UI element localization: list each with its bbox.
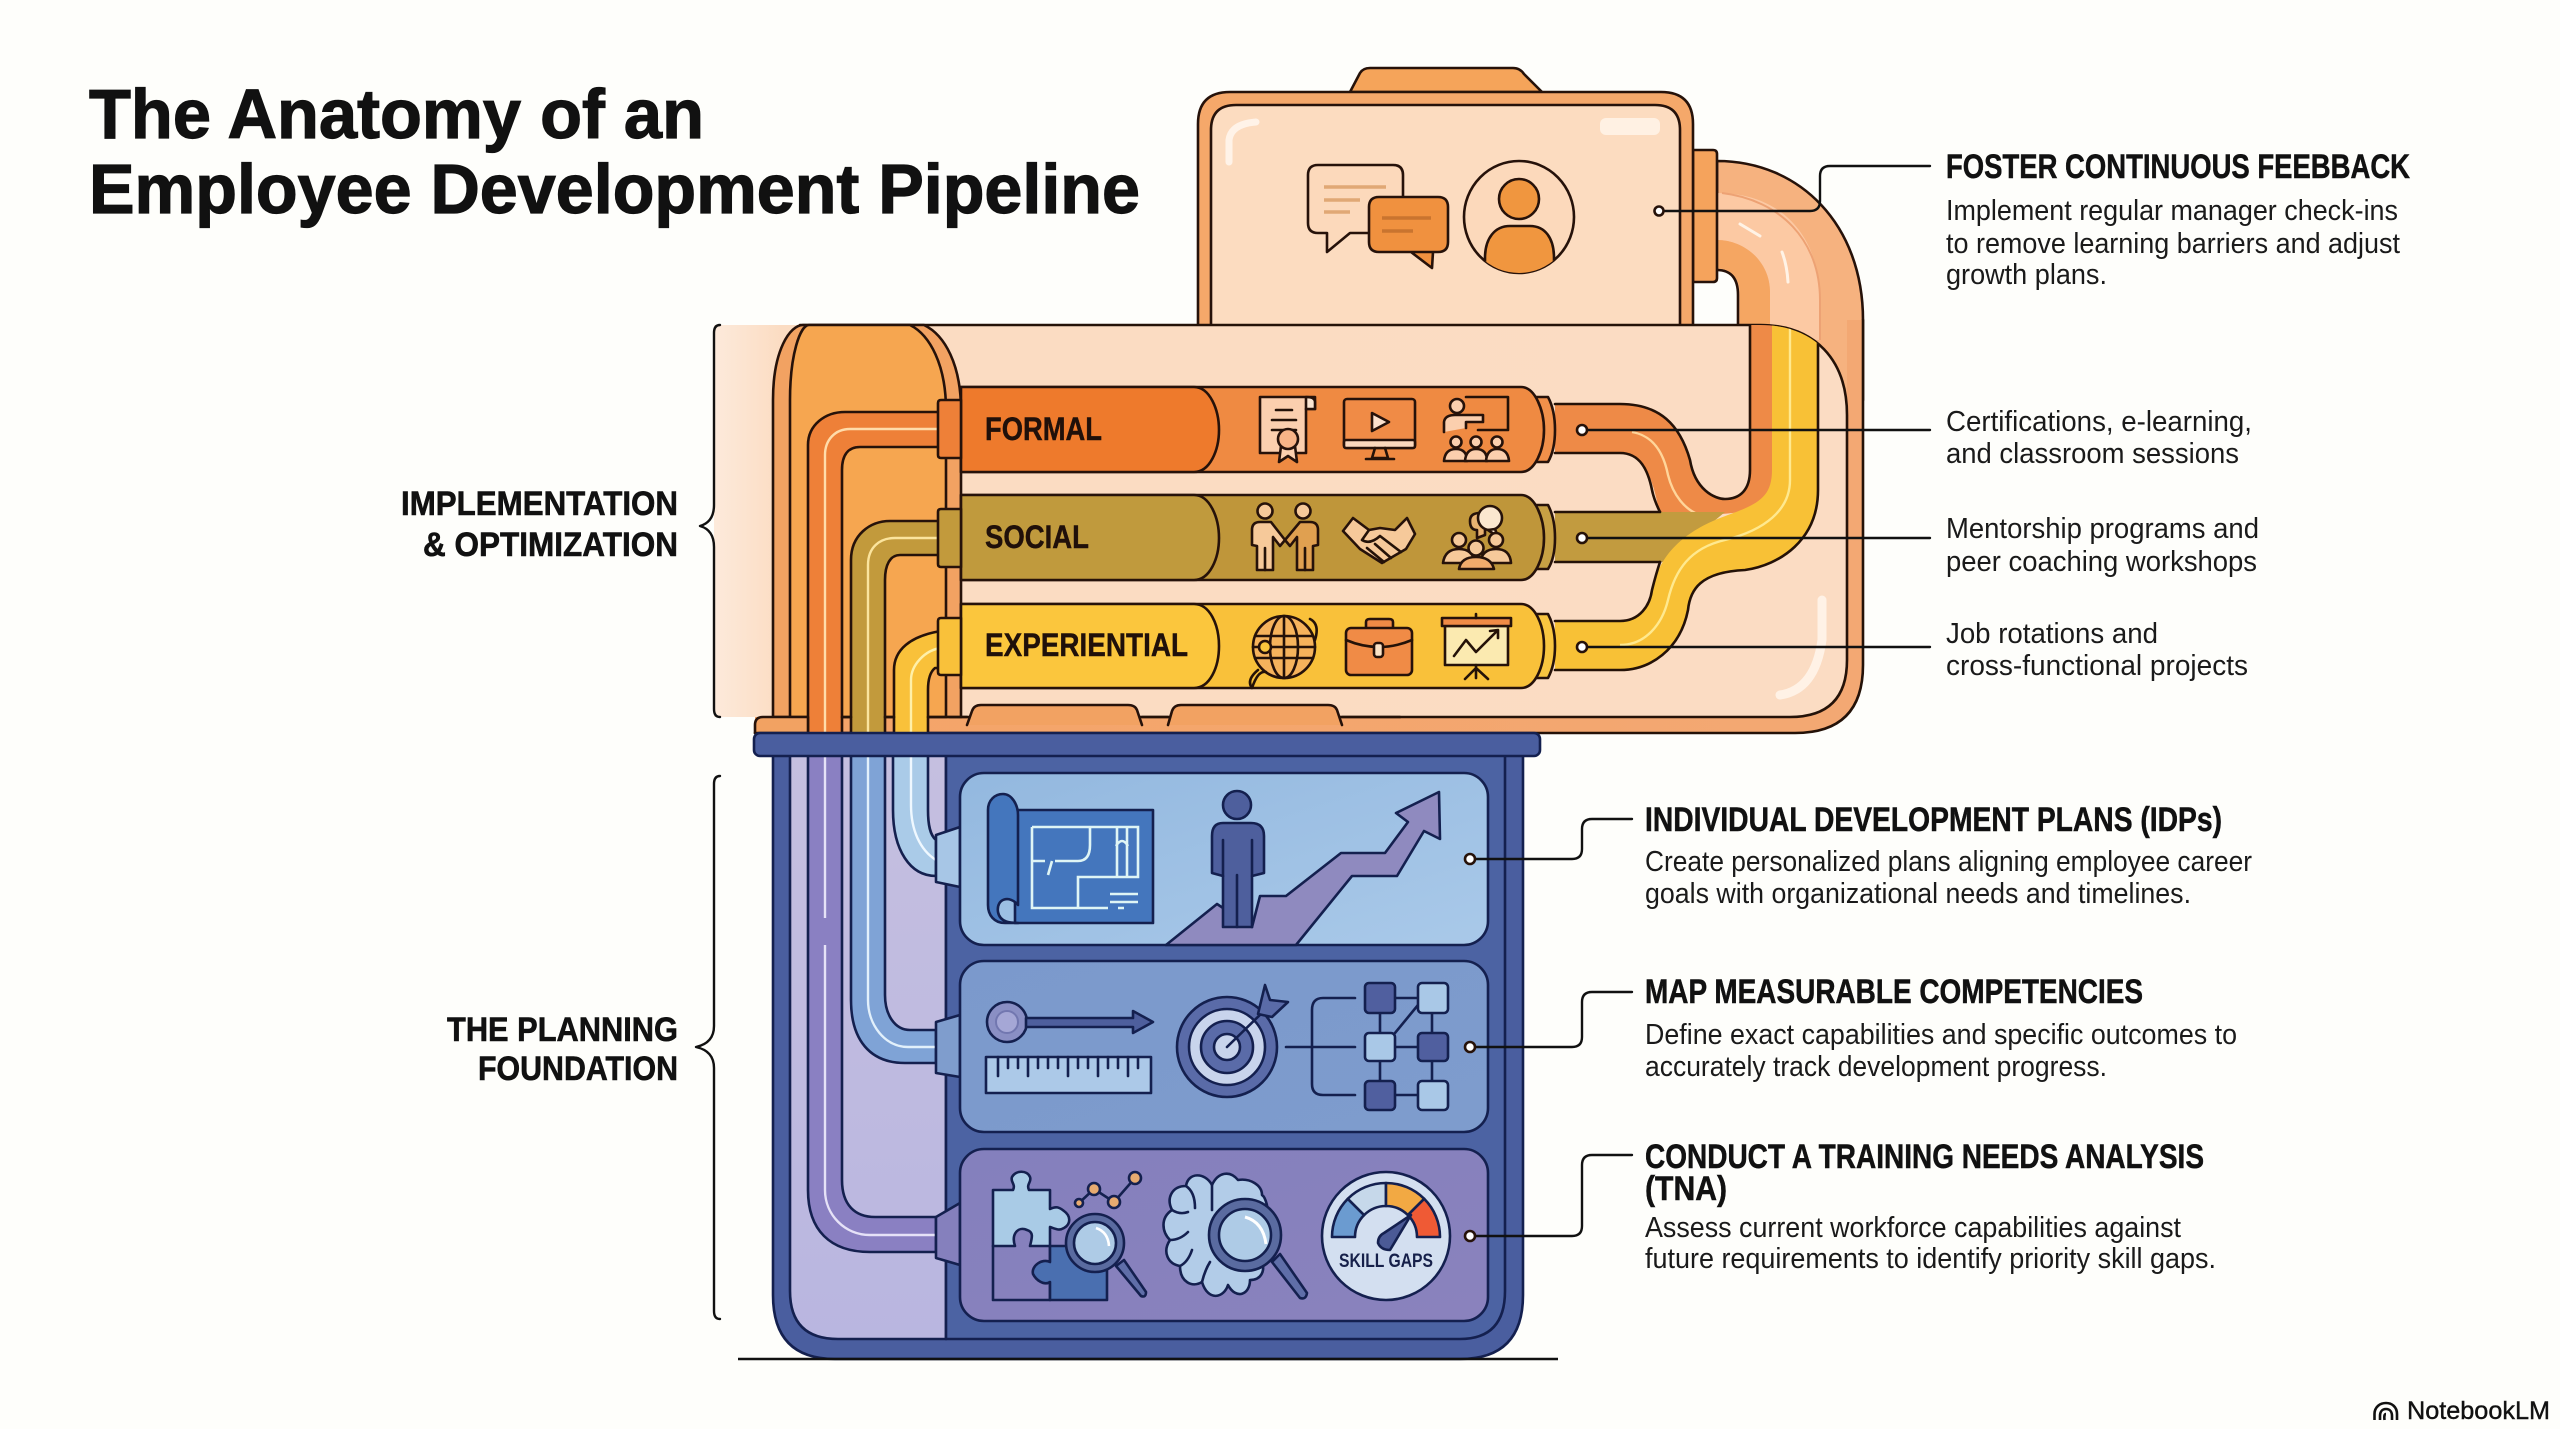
icon: growth path arrow bbox=[1166, 792, 1440, 945]
callout: experiential: cross-functional projects bbox=[1946, 650, 2248, 682]
pipe: social output bbox=[1555, 512, 1725, 562]
leader: training needs analysis bbox=[1465, 1155, 1632, 1241]
logo: NotebookLM: NotebookLM bbox=[2407, 1397, 2550, 1425]
callout: training needs analysis: CONDUCT A TRAINING NEEDS ANALYSIS bbox=[1645, 1138, 2204, 1176]
icon: brain bbox=[1164, 1174, 1269, 1296]
chart: trend line bbox=[1075, 1172, 1141, 1208]
bar bbox=[754, 733, 1540, 756]
icon: handshake bbox=[1343, 518, 1415, 563]
pipe: purple feed bbox=[808, 755, 936, 1252]
panel: map measurable competencies bbox=[960, 961, 1488, 1132]
callout: social bbox=[1946, 513, 2259, 578]
bracket: planning foundation bbox=[696, 776, 720, 1319]
panel: individual development plans bbox=[960, 773, 1488, 945]
callout: experiential: Job rotations and bbox=[1946, 618, 2158, 650]
section label: implementation and optimization: & OPTIMIZATION bbox=[423, 526, 678, 564]
callout: foster continuous feedback: FOSTER CONTINUOUS FEEBBACK bbox=[1946, 148, 2410, 186]
icon: magnifier on puzzle bbox=[1066, 1214, 1146, 1296]
label: experiential: EXPERIENTIAL bbox=[985, 627, 1188, 663]
icon: skill gaps gauge: SKILL GAPS bbox=[1339, 1251, 1433, 1272]
icon: peer group bbox=[1443, 506, 1511, 569]
icon: mentor pair bbox=[1252, 504, 1318, 570]
panel: foster continuous feedback tank bbox=[1198, 68, 1693, 340]
callout: foster continuous feedback: to remove learning barriers and adjust bbox=[1946, 228, 2400, 260]
left feed chamber bbox=[773, 325, 961, 735]
leader: foster continuous feedback bbox=[1654, 166, 1930, 216]
icon: blueprint bbox=[988, 794, 1153, 923]
icon: magnifier on brain bbox=[1209, 1199, 1307, 1298]
ground line bbox=[738, 1358, 1558, 1360]
leader: formal bbox=[1577, 425, 1930, 435]
panel: the planning foundation tank bbox=[696, 733, 1558, 1359]
callout: formal: and classroom sessions bbox=[1946, 438, 2239, 470]
flange: panel couplers bbox=[936, 827, 960, 887]
callout: map measurable competencies: MAP MEASURABLE COMPETENCIES bbox=[1645, 973, 2143, 1011]
icon: manager avatar bbox=[1464, 161, 1574, 280]
title bbox=[89, 75, 1140, 228]
icon: globe bbox=[1250, 616, 1317, 688]
callout: foster continuous feedback: Implement regular manager check-ins bbox=[1946, 195, 2398, 227]
pipe: blue feed bbox=[851, 755, 936, 1063]
callout: map measurable competencies: accurately track development progress. bbox=[1645, 1051, 2107, 1083]
icon: video lesson bbox=[1344, 399, 1415, 459]
callout: map measurable competencies bbox=[1645, 973, 2237, 1083]
callout: individual development plans: Create personalized plans aligning employee career bbox=[1645, 846, 2252, 878]
callout: individual development plans: goals with organizational needs and timelines. bbox=[1645, 878, 2191, 910]
callout: social: peer coaching workshops bbox=[1946, 546, 2257, 578]
section label: implementation and optimization: IMPLEMENTATION bbox=[401, 485, 678, 523]
icon: employee bbox=[1212, 791, 1264, 927]
callout: social: Mentorship programs and bbox=[1946, 513, 2259, 545]
callout: formal bbox=[1946, 406, 2252, 470]
title: The Anatomy of an bbox=[89, 75, 704, 153]
pipe: formal feed bbox=[808, 412, 941, 735]
callout: individual development plans: INDIVIDUAL DEVELOPMENT PLANS (IDPs) bbox=[1645, 801, 2222, 839]
icon: certificate bbox=[1260, 397, 1315, 462]
channel: experiential bbox=[938, 604, 1555, 688]
right output pipes bbox=[1555, 325, 1818, 670]
icon: puzzle bbox=[993, 1172, 1107, 1300]
callout: training needs analysis bbox=[1645, 1138, 2216, 1275]
panel: deploy multi-format learning tank bbox=[700, 320, 1863, 733]
tank couplers and collars bbox=[755, 705, 1400, 733]
panel: training needs analysis bbox=[960, 1149, 1488, 1321]
callout: foster continuous feedback bbox=[1946, 148, 2410, 291]
channel: formal bbox=[938, 387, 1555, 472]
icon: briefcase bbox=[1346, 619, 1412, 675]
callout: foster continuous feedback: growth plans. bbox=[1946, 259, 2107, 291]
icon: classroom instructor bbox=[1444, 397, 1509, 461]
section label: the planning foundation: FOUNDATION bbox=[478, 1050, 678, 1088]
icon: competency pointer bbox=[987, 1002, 1153, 1042]
callout: experiential bbox=[1946, 618, 2248, 682]
leader: map measurable competencies bbox=[1465, 992, 1632, 1052]
pipe: experiential output bbox=[1555, 325, 1818, 670]
section label: the planning foundation: THE PLANNING bbox=[447, 1011, 678, 1049]
leader: social bbox=[1577, 533, 1930, 543]
channel: social bbox=[938, 495, 1555, 580]
leader: experiential bbox=[1577, 642, 1930, 652]
bracket: implementation bbox=[700, 325, 720, 717]
callout: individual development plans bbox=[1645, 801, 2252, 910]
callout: training needs analysis: Assess current workforce capabilities against bbox=[1645, 1212, 2181, 1244]
pipe: experiential feed bbox=[894, 631, 941, 735]
icon: skills network bbox=[1286, 983, 1448, 1110]
callout: formal: Certifications, e-learning, bbox=[1946, 406, 2252, 438]
callout: map measurable competencies: Define exact capabilities and specific outcomes to bbox=[1645, 1019, 2237, 1051]
pipe: feedback tank down to learning tank bbox=[1693, 150, 1863, 400]
label: formal: FORMAL bbox=[985, 411, 1102, 447]
icon: target bbox=[1177, 985, 1288, 1097]
pipe: formal output bbox=[1555, 325, 1790, 516]
icon: speech bubbles bbox=[1308, 165, 1448, 268]
section label: the planning foundation bbox=[447, 1011, 678, 1088]
icon: growth chart board bbox=[1442, 614, 1511, 679]
callout: training needs analysis: (TNA) bbox=[1645, 1170, 1727, 1208]
icon: skill gaps gauge bbox=[1322, 1172, 1450, 1300]
section label: implementation and optimization bbox=[401, 485, 678, 564]
pipe: social feed bbox=[851, 521, 941, 735]
title: Employee Development Pipeline bbox=[89, 150, 1140, 228]
leader: individual development plans bbox=[1465, 819, 1632, 864]
icon: ruler bbox=[986, 1057, 1151, 1093]
callout: training needs analysis: future requirements to identify priority skill gaps. bbox=[1645, 1243, 2216, 1275]
label: social: SOCIAL bbox=[985, 519, 1089, 555]
pipe: light blue feed bbox=[893, 755, 936, 876]
